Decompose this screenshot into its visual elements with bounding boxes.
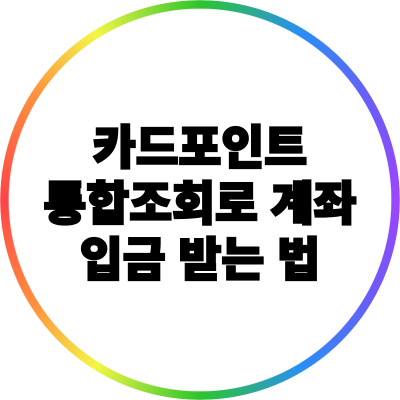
title: 카드포인트 [93,122,307,174]
title [43,122,356,286]
title: 입금 받는 법 [80,234,320,286]
title: 통합조회로 계좌 [43,178,356,230]
